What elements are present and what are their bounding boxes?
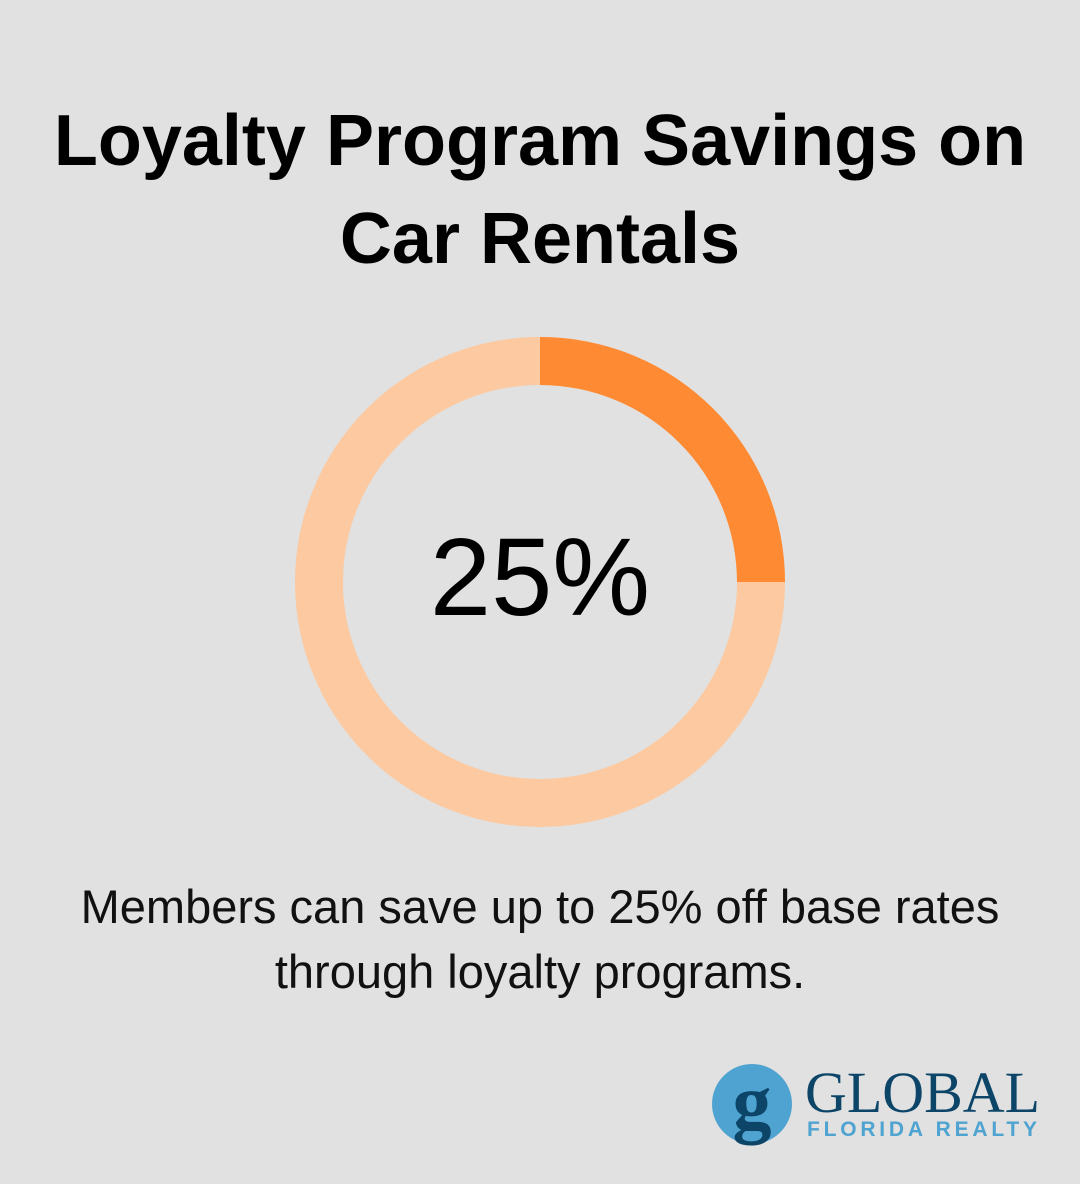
- title: Loyalty Program Savings on: [54, 101, 1026, 181]
- donut chart: 25%: [430, 516, 650, 639]
- logo: FLORIDA REALTY: [807, 1118, 1037, 1141]
- title: Car Rentals: [340, 199, 740, 279]
- description: through loyalty programs.: [275, 945, 805, 998]
- description: [81, 880, 999, 998]
- logo: [712, 1062, 1040, 1146]
- title: [54, 101, 1026, 279]
- description: Members can save up to 25% off base rates: [81, 880, 999, 933]
